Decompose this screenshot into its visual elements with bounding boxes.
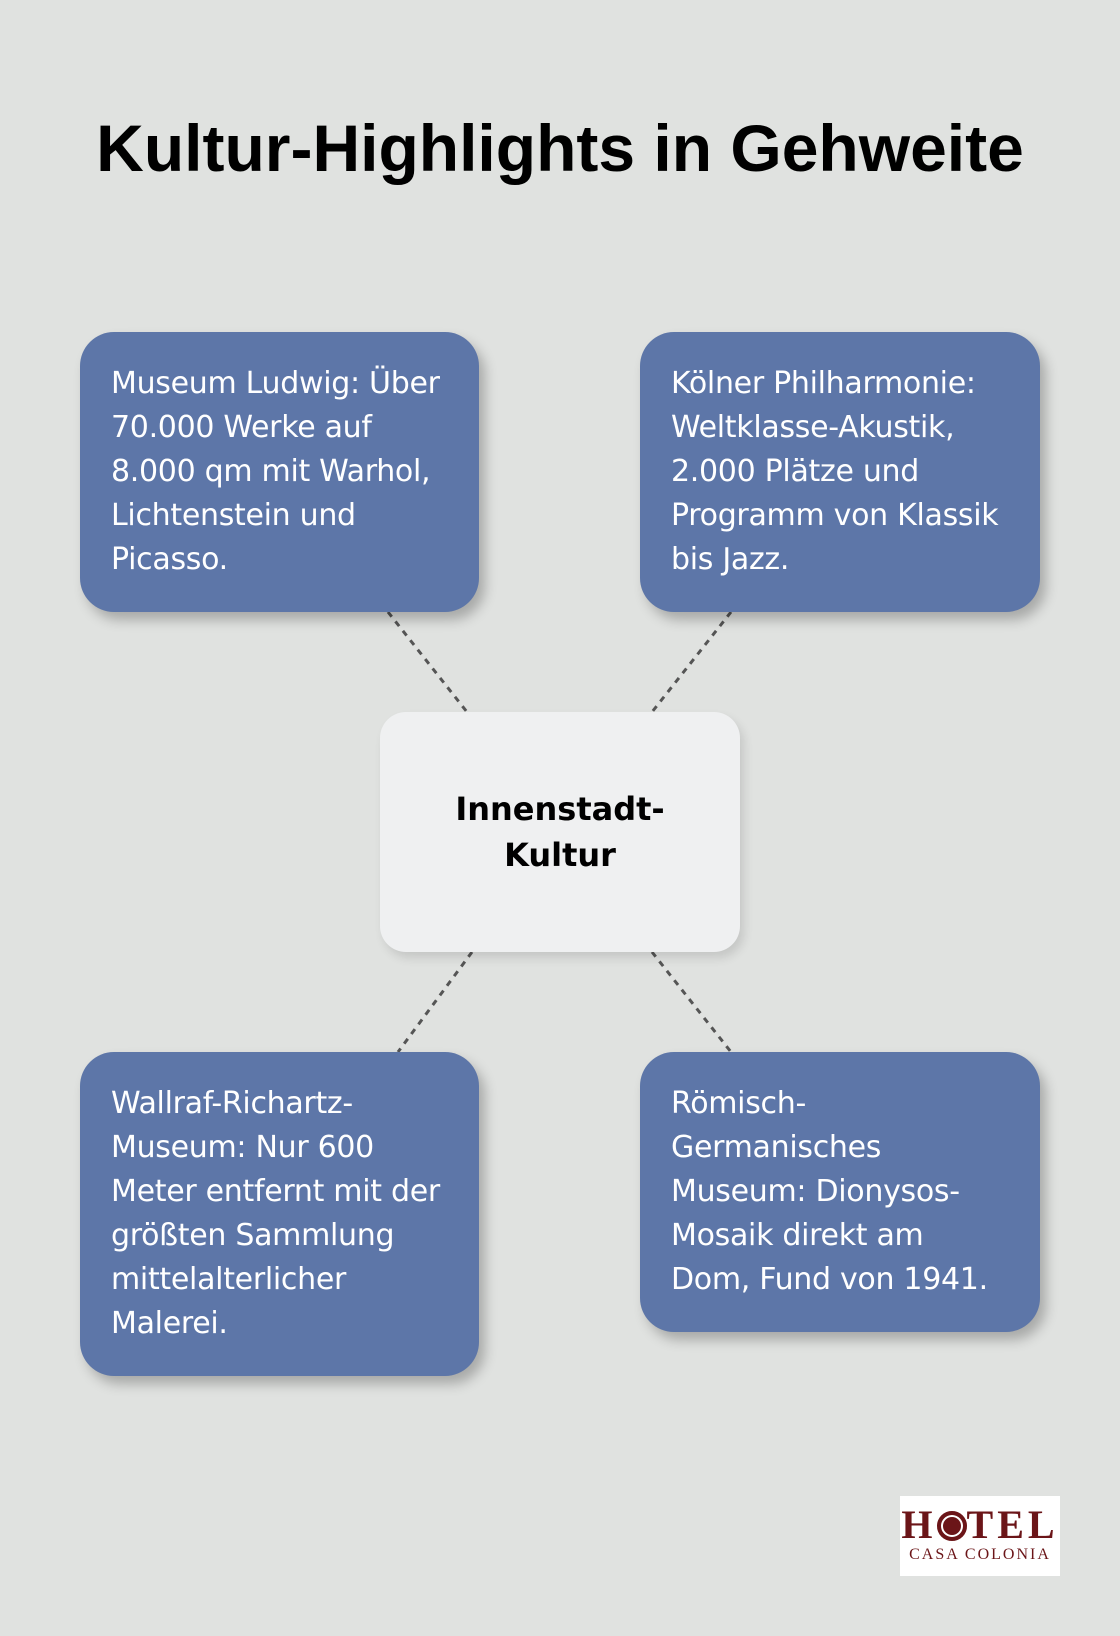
- panel: Römisch-Germanisches: Römisch-: [671, 1086, 806, 1121]
- panel: Philharmonie: 2.000 Plätze und: [671, 454, 919, 489]
- panel: Römisch-Germanisches: [640, 1052, 1040, 1332]
- panel: Museum Ludwig: 70.000 Werke auf: [111, 410, 372, 445]
- panel: Wallraf-Richartz: mittelalterlicher: [111, 1262, 346, 1297]
- panel: Römisch-Germanisches: Germanisches: [671, 1130, 881, 1165]
- panel: Römisch-Germanisches: Dom, Fund von 1941.: [671, 1262, 988, 1297]
- panel: Wallraf-Richartz: Meter entfernt mit der: [111, 1174, 440, 1209]
- panel: Museum Ludwig: 8.000 qm mit Warhol,: [111, 454, 430, 489]
- panel: Philharmonie: Kölner Philharmonie:: [671, 366, 976, 401]
- panel: Philharmonie: [640, 332, 1040, 612]
- title: Kultur-Highlights in Gehweite: [96, 111, 1024, 185]
- panel: Römisch-Germanisches: Museum: Dionysos-: [671, 1174, 960, 1209]
- center node: Innenstadt-: [455, 790, 665, 828]
- center node: Kultur: [504, 836, 616, 874]
- logo: [900, 1496, 1060, 1576]
- panel: Wallraf-Richartz: Wallraf-Richartz-: [111, 1086, 353, 1121]
- center node: [380, 712, 740, 952]
- panel: Philharmonie: bis Jazz.: [671, 542, 789, 577]
- panel: Philharmonie: Weltklasse-Akustik,: [671, 410, 954, 445]
- panel: Römisch-Germanisches: Mosaik direkt am: [671, 1218, 924, 1253]
- panel: Museum Ludwig: Museum Ludwig: Über: [111, 366, 440, 401]
- panel: Philharmonie: Programm von Klassik: [671, 498, 998, 533]
- panel: Museum Ludwig: Picasso.: [111, 542, 228, 577]
- panel: Wallraf-Richartz: Malerei.: [111, 1306, 228, 1341]
- panel: Museum Ludwig: Lichtenstein und: [111, 498, 356, 533]
- panel: Wallraf-Richartz: [80, 1052, 479, 1376]
- panel: Wallraf-Richartz: größten Sammlung: [111, 1218, 394, 1253]
- logo: H TEL: [901, 1502, 1059, 1547]
- logo: CASA COLONIA: [909, 1546, 1051, 1563]
- panel: Wallraf-Richartz: Museum: Nur 600: [111, 1130, 374, 1165]
- panel: Museum Ludwig: [80, 332, 479, 612]
